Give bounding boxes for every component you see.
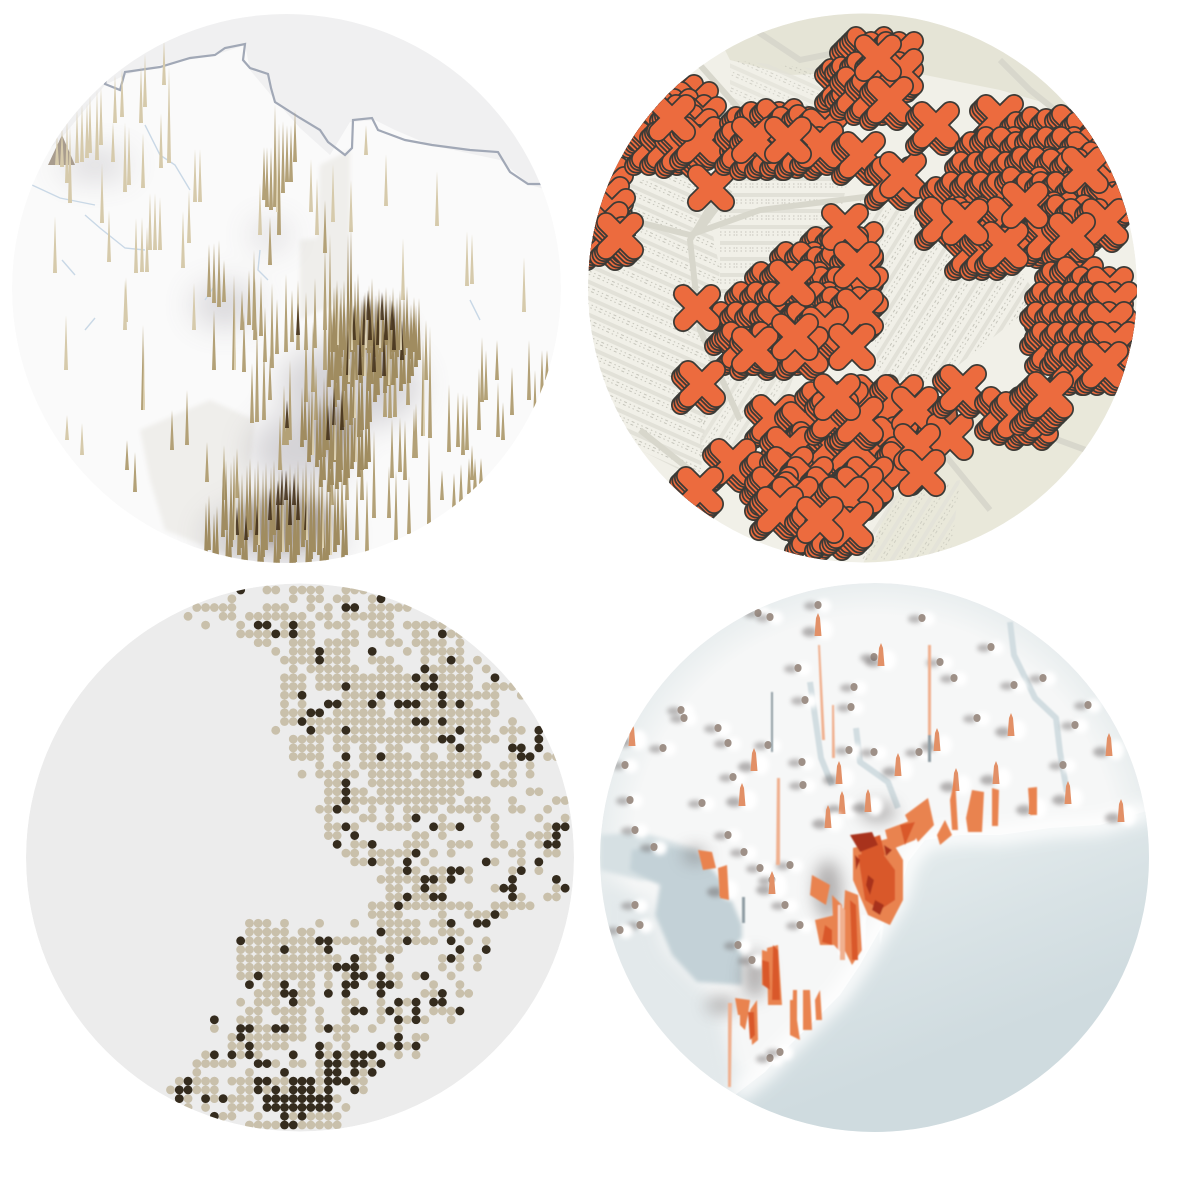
relief: grey-brown bumps xyxy=(606,599,1101,1066)
map: upper-right plain land xyxy=(725,14,1071,110)
water: open sea xyxy=(735,810,1150,1140)
spikes: dense clusters xyxy=(204,227,421,573)
markers: orange X stacks xyxy=(577,36,1129,551)
region: pale grey area beyond the border xyxy=(52,14,542,188)
map: street texture xyxy=(585,60,1040,560)
relief: shadows of large columns xyxy=(683,802,896,1013)
spikes: bright highlights xyxy=(143,127,425,555)
panel: tan spike map xyxy=(32,14,548,563)
spikes: dark cores xyxy=(235,290,404,540)
dots: dark cells xyxy=(179,590,565,1125)
coast highlight xyxy=(735,810,1150,1095)
relief: isolated orange spikes xyxy=(616,613,1136,900)
panel: orange relief map xyxy=(598,583,1150,1140)
dots: tan cells xyxy=(170,590,565,1125)
relief: orange columns xyxy=(698,645,1037,1087)
shading: dark cluster cores xyxy=(237,307,413,546)
map: lower-right plain land xyxy=(864,376,1115,562)
shading: soft shadows under spikes xyxy=(60,153,420,567)
water: rivers and inlets xyxy=(810,622,1067,808)
dots: tan and dark grid xyxy=(170,590,565,1125)
wedge: crowded spikes at the left rim xyxy=(48,135,75,165)
spikes: pale isolated xyxy=(53,40,526,455)
panel: orange X marker map xyxy=(577,0,1140,570)
rivers xyxy=(32,125,480,345)
water: western bay xyxy=(630,845,742,985)
panel: dot grid map xyxy=(26,584,574,1132)
region: grey territory patches xyxy=(140,150,350,560)
water: north-west inlet xyxy=(600,832,700,880)
map: major roads xyxy=(638,32,1086,519)
land: south-west grey plain xyxy=(603,891,728,1089)
markers: filled cluster masses xyxy=(612,174,1132,542)
spikes: tan xyxy=(125,104,549,552)
border line xyxy=(105,44,542,184)
